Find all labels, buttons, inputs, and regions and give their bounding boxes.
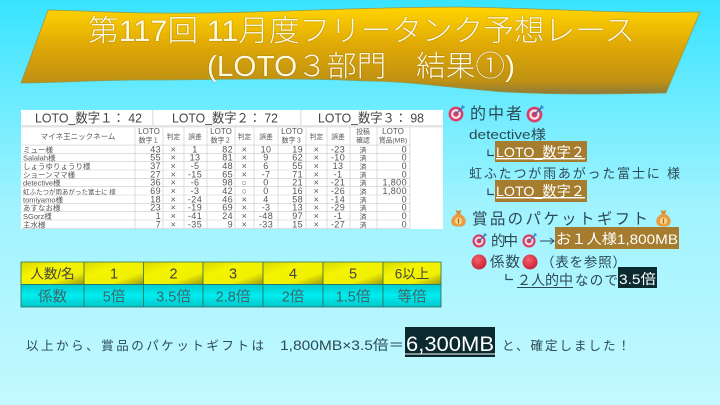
conclusion text: 1,800MB×3.5倍＝ [280,337,404,353]
coefficient value row [38,288,426,306]
table row: 虹ふたつが雨あがった富士に 様: 虹ふたつが雨あがった富士に 様 [23,187,116,196]
table row: 主水様: -35 [188,219,202,229]
table row: ショーンママ様: ショーンママ様 [23,169,76,179]
table row: ミュー様: × [314,144,319,154]
table row: tomiyamo様 [23,194,407,204]
table row: あすなお様: あすなお様 [23,203,61,213]
table title cells [35,110,424,126]
table title cells: LOTO_数字１： 42 [35,110,142,126]
table row: しょうゆりょうり様: 済 [360,162,367,171]
table row: ミュー様: × [171,144,176,154]
table row: ショーンママ様 [23,169,407,179]
coefficient header row: 3 [229,266,237,282]
coefficient header row: 1 [110,266,118,282]
table row: ショーンママ様: -1 [334,169,342,179]
table row: detective様: ○ [242,178,247,188]
table row: Salalah様: 済 [360,154,367,163]
table header: 誤差 [259,132,273,141]
table row: ミュー様: 0 [402,144,407,154]
table header: 投稿 [356,127,370,136]
table row: ショーンママ様: 65 [222,169,233,179]
coefficient value row: 5倍 [103,288,125,306]
table row: しょうゆりょうり様: 0 [402,161,407,171]
table row: ショーンママ様: 27 [150,169,161,179]
table row: tomiyamo様: -14 [331,194,345,204]
coefficient result: ２人的中 [517,272,573,288]
table row: ショーンママ様: -7 [262,169,270,179]
table header: 判定 [238,132,251,141]
table row: Salalah様: 9 [263,153,269,163]
conclusion text [26,327,630,357]
table row: あすなお様: 済 [360,204,367,213]
winner 1: detective様 [469,127,587,162]
table row: tomiyamo様: 済 [360,195,367,204]
table row: detective様: 36 [150,178,161,188]
table row: 虹ふたつが雨あがった富士に 様: 69 [150,186,161,196]
table row: しょうゆりょうり様: 37 [150,161,161,171]
table row: Salalah様: Salalah様 [23,153,56,163]
table header: LOTO [210,127,232,136]
table header: マイネ王ニックネーム [41,132,115,141]
table row: 主水様: × [171,219,176,229]
table header: 判定 [167,132,180,141]
table row: detective様: 21 [292,178,303,188]
table row: SGorz様: -41 [188,211,202,221]
table row: あすなお様: × [314,203,319,213]
table row: Salalah様: 55 [150,153,161,163]
table row: 虹ふたつが雨あがった富士に 様: 0 [263,186,269,196]
table row: しょうゆりょうり様: 13 [333,161,343,171]
table row: 主水様: 主水様 [23,219,46,229]
table row: SGorz様: × [242,211,247,221]
table row: 虹ふたつが雨あがった富士に 様: ○ [242,186,247,196]
table row: あすなお様: × [171,203,176,213]
table row: しょうゆりょうり様: しょうゆりょうり様 [23,161,91,171]
table header: 誤差 [331,132,345,141]
table row: detective様: 98 [222,178,233,188]
table row: SGorz様: 24 [222,211,233,221]
table row: detective様: -6 [191,178,199,188]
table header: 判定 [310,132,323,141]
coefficient value row: 等倍 [398,288,426,306]
coefficient line [472,254,626,271]
table row: ミュー様: -23 [331,144,345,154]
table row: Salalah様: × [171,153,176,163]
table row: 虹ふたつが雨あがった富士に 様: -26 [331,186,345,196]
table row: 主水様: 9 [228,219,233,229]
table row: しょうゆりょうり様: -5 [191,161,199,171]
table grid [22,127,410,229]
coefficient result [506,267,657,288]
table row: ミュー様 [23,144,407,154]
table row: あすなお様: 13 [292,203,303,213]
table row: 主水様: × [314,219,319,229]
table row: ミュー様: × [242,144,247,154]
coefficient line: 係数 [490,254,520,271]
table row: あすなお様: 0 [402,203,407,213]
table row: しょうゆりょうり様: 48 [222,161,233,171]
title text: 第117回 11月度フリータンク予想レース [88,15,635,48]
table row: ショーンママ様: × [242,169,247,179]
table row: detective様: 済 [360,179,367,188]
table row: SGorz様: × [171,211,176,221]
coefficient value row: 3.5倍 [156,288,191,306]
table header: 数字１ [139,136,159,144]
coefficient header row: 6以上 [395,266,429,282]
table row: ミュー様: 19 [292,144,303,154]
table row: ショーンママ様: × [314,169,319,179]
table row: ミュー様: 1 [192,144,198,154]
title text [88,15,635,83]
table row: Salalah様: -10 [331,153,345,163]
table row: ショーンママ様: 0 [402,169,407,179]
prize per winner: 的中 [491,233,518,250]
winner 2: 虹ふたつが雨あがった富士に 様: LOTO_数字２ [496,183,585,199]
conclusion text: と、確定しました！ [502,338,630,353]
result highlight: 6,300MB: 6,300MB [406,333,494,356]
coefficient line: （表を参照） [541,255,626,270]
coefficient header row: 2 [169,266,178,282]
table row: detective様: -21 [331,178,345,188]
table row: Salalah様: 0 [402,153,407,163]
table row: しょうゆりょうり様: 6 [263,161,269,171]
table row: 主水様 [23,219,407,229]
table row: あすなお様: 23 [150,203,161,213]
table row: Salalah様: 62 [292,153,303,163]
arrow [540,238,554,244]
table row: 虹ふたつが雨あがった富士に 様: 済 [360,187,367,196]
coefficient value row: 2倍 [282,288,304,306]
table row: SGorz様: -1 [334,211,342,221]
conclusion text: 以上から、賞品のパケットギフトは [26,339,264,353]
winners heading [449,104,544,123]
table row: SGorz様: 0 [402,211,407,221]
coefficient value row: 係数 [38,288,67,306]
table row: Salalah様: 81 [222,153,233,163]
table row: ミュー様: 10 [261,144,271,154]
table header: 数字２ [211,136,231,144]
table row: Salalah様 [23,153,407,163]
table row: detective様: × [171,178,176,188]
table header: 誤差 [188,132,202,141]
table header: LOTO [281,127,303,136]
table row: あすなお様 [23,203,407,213]
table row: detective様 [23,178,407,188]
table row: あすなお様: × [242,203,247,213]
table row: tomiyamo様: × [171,194,176,204]
table row: tomiyamo様: 58 [292,194,303,204]
table row: 主水様: 15 [292,219,303,229]
table row: detective様: 0 [263,178,269,188]
table row: しょうゆりょうり様: × [314,161,319,171]
winner 1: detective様: detective様 [469,127,546,142]
table row: しょうゆりょうり様: × [242,161,247,171]
table row: ショーンママ様: -15 [188,169,202,179]
table header: LOTO [138,127,160,136]
table row: 虹ふたつが雨あがった富士に 様: -3 [191,186,199,196]
table row: 虹ふたつが雨あがった富士に 様: 42 [222,186,233,196]
coefficient header row: 人数/名 [30,266,75,282]
table row: tomiyamo様: × [242,194,247,204]
table row: Salalah様: 13 [190,153,200,163]
table header: 数字３ [282,136,302,144]
table header: 賞品(MB) [379,136,407,144]
table row: しょうゆりょうり様: 55 [292,161,303,171]
coefficient header row [30,266,429,282]
table row: 主水様: 0 [402,219,407,229]
coefficient header row: 4 [289,266,297,282]
table row: 虹ふたつが雨あがった富士に 様: 16 [292,186,303,196]
table row: あすなお様: -19 [188,203,202,213]
table row: detective様: × [314,178,319,188]
table header: LOTO [382,127,404,136]
table row: ミュー様: 82 [222,144,233,154]
table row: tomiyamo様: × [314,194,319,204]
table row: tomiyamo様: 18 [150,194,161,204]
table row: 虹ふたつが雨あがった富士に 様: 1,800 [382,186,407,196]
table row: tomiyamo様: tomiyamo様 [23,194,64,204]
table header [41,127,407,144]
coefficient value row: 2.8倍 [216,288,250,306]
coefficient value row: 1.5倍 [336,288,370,306]
winners heading: 的中者 [470,105,524,123]
table row: SGorz様: 1 [156,211,161,221]
table row: ショーンママ様: × [171,169,176,179]
table row: ショーンママ様: 済 [360,170,367,179]
winner 2: 虹ふたつが雨あがった富士に 様 [469,166,680,202]
table row: あすなお様: -3 [262,203,270,213]
table row: 主水様: -27 [331,219,345,229]
table row: detective様: detective様 [23,178,61,188]
table row: 虹ふたつが雨あがった富士に 様 [23,186,407,196]
table row: tomiyamo様: 4 [263,194,269,204]
table row: Salalah様: × [242,153,247,163]
table row: tomiyamo様: 46 [222,194,233,204]
prize per winner [472,227,679,250]
table row: SGorz様 [23,211,407,221]
winner 2: 虹ふたつが雨あがった富士に 様: 虹ふたつが雨あがった富士に 様 [469,166,680,181]
winner 1: detective様: LOTO_数字２ [496,144,585,160]
table row: 主水様: × [242,219,247,229]
table row: SGorz様: SGorz様 [23,211,52,221]
table row: SGorz様: 済 [360,212,367,221]
table row: 主水様: 済 [360,220,367,229]
table row: detective様: 1,800 [382,178,407,188]
prize heading: 賞品のパケットギフト [472,210,648,228]
table row: しょうゆりょうり様: × [171,161,176,171]
table row: ミュー様: ミュー様 [23,144,53,154]
table row: ショーンママ様: 71 [292,169,303,179]
table title cells: LOTO_数字２： 72 [172,110,278,126]
table row: tomiyamo様: -24 [188,194,202,204]
table header: 確認 [356,136,370,144]
table title cells: LOTO_数字３： 98 [318,110,424,126]
table row: 主水様: 7 [156,219,161,229]
table row: ミュー様: 43 [150,144,161,154]
table row: 虹ふたつが雨あがった富士に 様: × [171,186,176,196]
table row: あすなお様: -29 [331,203,345,213]
title banner [21,7,700,94]
results table panel [21,110,443,229]
title text: (LOTO３部門 結果①) [207,50,515,83]
prize per winner: お１人様1,800MB [556,231,678,247]
table row: SGorz様: 97 [292,211,303,221]
table row: Salalah様: × [314,153,319,163]
coefficient table [21,262,441,307]
coefficient header row: 5 [349,266,357,282]
coefficient result: 3.5倍 [619,271,656,287]
coefficient result: なので [575,273,618,288]
table row: しょうゆりょうり様 [23,161,407,171]
table row: tomiyamo様: 0 [402,194,407,204]
table row: SGorz様: -48 [259,211,273,221]
table row: あすなお様: 69 [222,203,233,213]
table row: 主水様: -33 [259,219,273,229]
table row: ミュー様: 済 [360,145,367,154]
table row: SGorz様: × [314,211,319,221]
table row: 虹ふたつが雨あがった富士に 様: × [314,186,319,196]
